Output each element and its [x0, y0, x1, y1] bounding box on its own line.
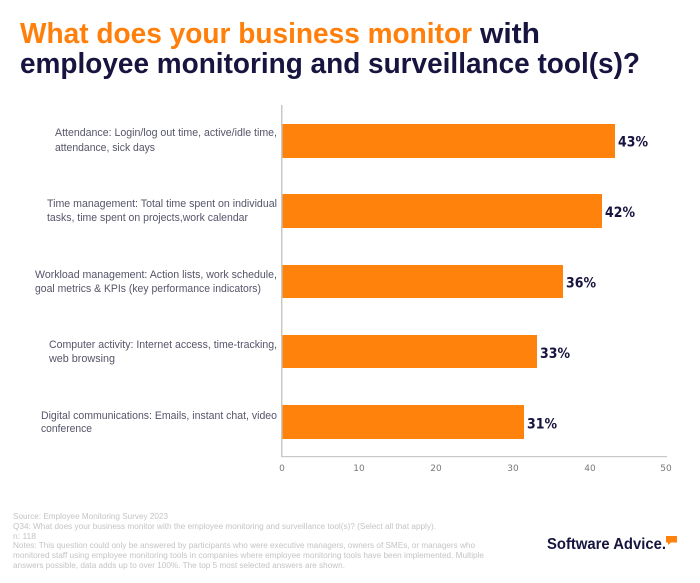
axis tick labels: 10	[353, 464, 365, 474]
bar: workload management: 36%	[566, 276, 596, 292]
title: What does your business monitor	[20, 18, 472, 50]
bar: workload management	[282, 265, 596, 298]
bar: digital communications: 31%	[527, 416, 557, 432]
category labels: Time management: Total time spent on individual	[47, 198, 277, 210]
category labels	[35, 127, 277, 435]
bar chart	[35, 105, 672, 474]
logo: Software Advice: Software Advice.	[547, 536, 666, 553]
footnotes: Q34: What does your business monitor with the employee monitoring and surveillance tool(s)? (Select all that apply).	[13, 521, 436, 531]
bar: time management	[282, 194, 635, 228]
bar: computer activity	[282, 335, 570, 368]
axis tick labels: 40	[584, 464, 596, 474]
category labels: conference	[41, 423, 92, 435]
bar: time management: 42%	[605, 205, 635, 221]
axis tick labels: 30	[507, 464, 519, 474]
category labels: attendance, sick days	[55, 142, 155, 154]
footnotes: n: 118	[13, 531, 36, 541]
category labels: tasks, time spent on projects,work calendar	[47, 212, 248, 224]
bar: attendance: 43%	[618, 134, 648, 150]
footnotes: monitored staff using employee monitoring tools in companies where employee monitoring tools have been implemented. Multiple	[13, 550, 484, 560]
axis tick labels: 0	[279, 464, 285, 474]
footnotes: Notes: This question could only be answered by participants who were executive managers, owners of SMEs, or managers who	[13, 540, 475, 550]
footnotes: answers possible, data adds up to over 100%. The top 5 most selected answers are shown.	[13, 560, 345, 570]
axis tick labels: 50	[660, 464, 672, 474]
category labels: web browsing	[48, 353, 115, 365]
category labels: goal metrics & KPIs (key performance indicators)	[35, 283, 261, 295]
axes	[281, 105, 667, 457]
title: employee monitoring and surveillance tool(s)?	[20, 48, 640, 80]
bar: digital communications	[282, 405, 557, 439]
title	[20, 18, 640, 80]
category labels: Workload management: Action lists, work schedule,	[35, 269, 277, 281]
footnotes	[13, 511, 484, 570]
footnotes: Source: Employee Monitoring Survey 2023	[13, 511, 168, 521]
bar: attendance	[282, 124, 648, 158]
bar: computer activity: 33%	[540, 346, 570, 362]
title: with	[479, 18, 540, 50]
category labels: Digital communications: Emails, instant chat, video	[41, 410, 277, 422]
axis tick labels	[279, 464, 672, 474]
axis tick labels: 20	[430, 464, 442, 474]
category labels: Computer activity: Internet access, time-tracking,	[49, 339, 277, 351]
icon: speech bubble	[666, 536, 677, 545]
category labels: Attendance: Login/log out time, active/idle time,	[55, 127, 277, 139]
